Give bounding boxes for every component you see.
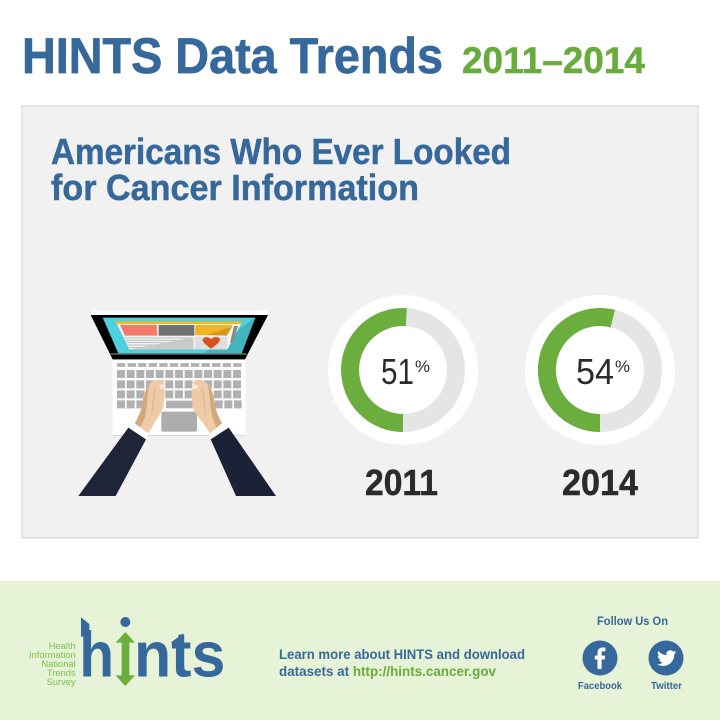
donut chart: 2011: % — [415, 357, 430, 376]
title: HINTS Data Trends — [22, 27, 443, 84]
text: learn more — [279, 646, 525, 679]
screen text lines — [125, 338, 193, 347]
logo: HINTS: h — [79, 619, 114, 691]
heading: Americans Who Ever Looked — [51, 131, 511, 172]
heading: for Cancer Information — [51, 167, 419, 208]
logo tagline: Trends — [47, 668, 76, 678]
logo tagline: National — [41, 659, 76, 669]
title: 2011–2014 — [462, 40, 645, 81]
donut chart: 2014 — [525, 295, 675, 445]
donut chart: 2011 — [328, 295, 478, 445]
text: learn more: Learn more about HINTS and download — [279, 646, 525, 662]
logo tagline — [29, 641, 76, 687]
donut chart: 2011: 51 — [381, 351, 414, 392]
icon: twitter — [648, 640, 684, 676]
logo: HINTS — [29, 617, 225, 691]
logo tagline: Health — [49, 641, 76, 651]
text: learn more: datasets at http://hints.cancer.gov — [279, 663, 496, 679]
label: facebook: Facebook — [578, 681, 622, 692]
label: 2014: 2014 — [562, 462, 638, 503]
icon: laptop with hands — [78, 311, 276, 496]
left hand — [78, 380, 165, 496]
heading — [51, 131, 511, 208]
logo: HINTS: nts — [134, 619, 225, 691]
keyboard keys — [117, 365, 242, 404]
label: 2011: 2011 — [365, 462, 438, 503]
logo tagline: Information — [29, 650, 76, 660]
footer band — [0, 581, 720, 720]
panel: cancer information — [22, 106, 698, 538]
icon: facebook — [582, 640, 618, 676]
donut chart: 2014: 54 — [576, 351, 614, 392]
logo tagline: Survey — [47, 677, 76, 687]
heading: follow us on: Follow Us On — [597, 614, 668, 628]
right hand — [192, 380, 276, 496]
donut chart: 2014: % — [615, 357, 630, 376]
label: twitter: Twitter — [651, 681, 682, 692]
